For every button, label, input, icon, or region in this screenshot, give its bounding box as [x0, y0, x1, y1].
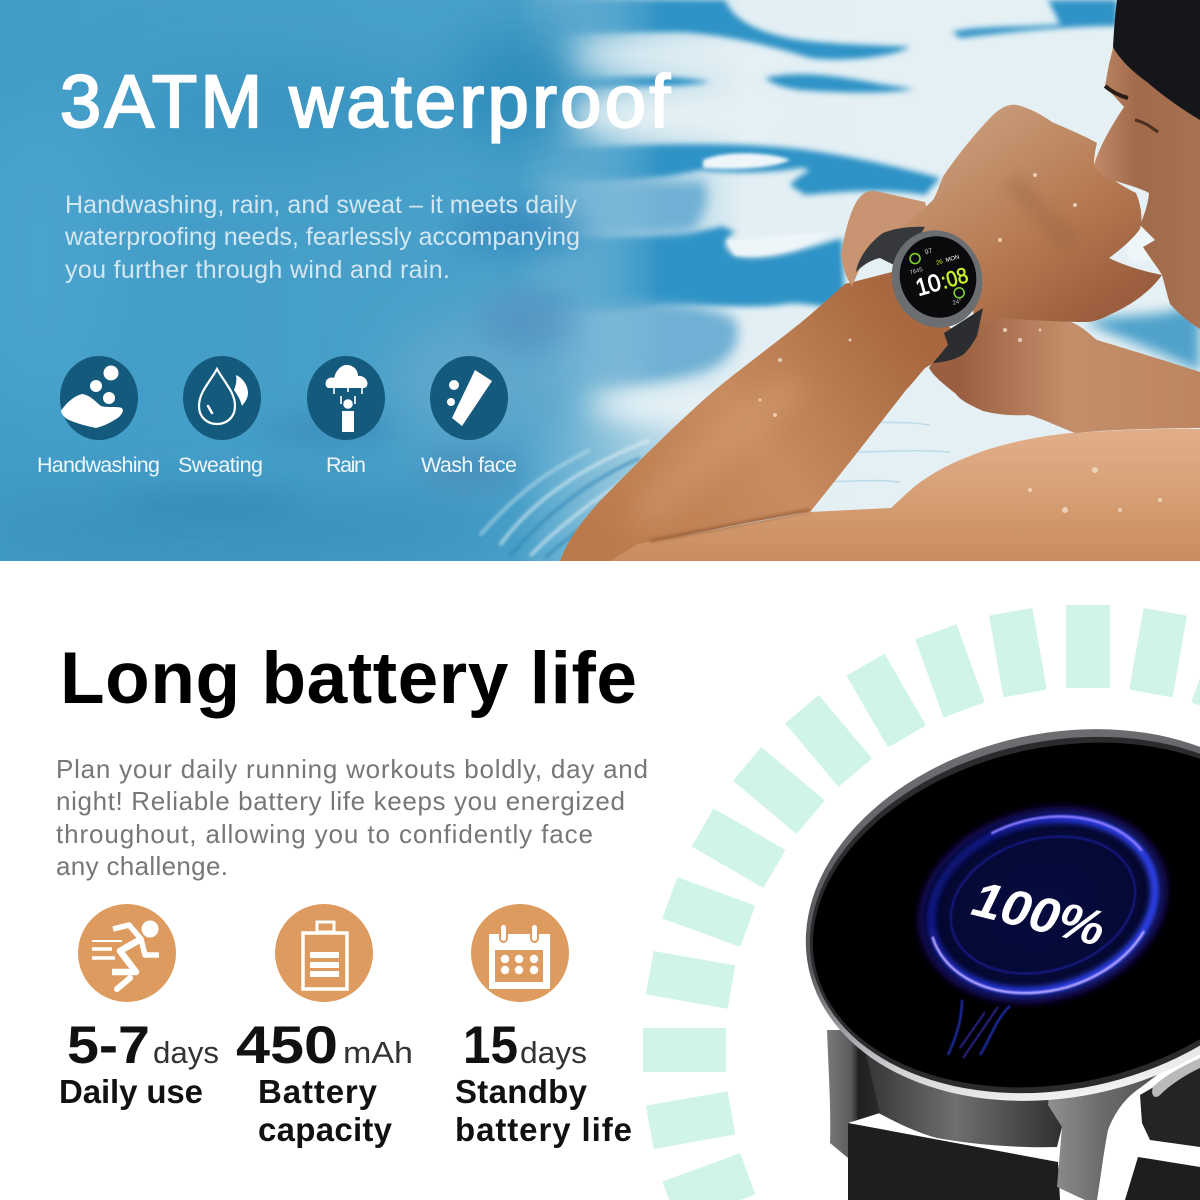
stat: 15 days standby battery life	[455, 1016, 632, 1148]
icon labels: Wash face	[421, 453, 517, 477]
watch screen	[900, 236, 976, 318]
stat: 5-7 days daily use: Daily use	[59, 1073, 203, 1110]
watch time display	[909, 248, 968, 305]
heading: Long battery life: Long battery life	[60, 638, 637, 719]
stat: 5-7 days daily use	[59, 1016, 219, 1110]
skin highlights and water droplets	[640, 173, 1162, 541]
battery description text: night! Reliable battery life keeps you energized	[56, 786, 625, 816]
watch time display: 26	[936, 259, 944, 267]
watch time display: 10	[913, 269, 944, 302]
watch time display: 24°	[952, 298, 963, 307]
watch time display: 97	[924, 248, 933, 257]
right lug	[1048, 990, 1200, 1200]
swimmer face and swim cap	[1094, 0, 1200, 329]
lower hand and arm	[929, 318, 1200, 433]
smartwatch on wrist	[856, 226, 983, 363]
glowing blue charge ring	[899, 783, 1187, 1027]
watch time display: 7645	[909, 267, 924, 276]
stat: 15 days standby battery life: days	[520, 1035, 587, 1070]
case underside	[850, 1050, 1062, 1147]
battery description text: throughout, allowing you to confidently face	[56, 819, 593, 849]
left lug	[827, 1030, 880, 1158]
stat: 5-7 days daily use: days	[153, 1035, 219, 1070]
blue swells across the pool	[530, 0, 1117, 312]
icon: rain	[307, 356, 385, 440]
charging tail	[948, 1000, 1010, 1058]
waterproof description text: you further through wind and rain.	[65, 256, 450, 284]
icon: calendar	[471, 904, 569, 1002]
icon: runner	[78, 904, 176, 1002]
icon: wash face tube	[430, 356, 508, 440]
crown button	[1152, 1058, 1200, 1097]
fingers wrapping wrist	[841, 191, 930, 286]
icon labels: Handwashing	[37, 453, 160, 477]
watch case	[892, 230, 982, 328]
back of fist	[900, 105, 1162, 325]
watch straps	[848, 1123, 1060, 1200]
watch screen	[781, 699, 1200, 1131]
upper arm along pool edge	[560, 429, 1200, 561]
watch time display: :08	[938, 262, 971, 294]
battery description text: Plan your daily running workouts boldly, day and	[56, 754, 648, 784]
ripples near bottom centre	[480, 440, 650, 558]
stat: 450 mAh battery capacity	[236, 1016, 413, 1148]
icon: handwashing	[60, 356, 138, 440]
stat: 15 days standby battery life: Standby	[455, 1073, 588, 1110]
forearm	[560, 270, 965, 561]
waterproof description text: waterproofing needs, fearlessly accompanying	[64, 223, 580, 251]
stat: 450 mAh battery capacity: 450	[236, 1016, 338, 1075]
mint progress ring segments	[643, 605, 1200, 1200]
waterproof description text	[64, 191, 580, 284]
icon: sweating drop	[183, 356, 261, 440]
waterproof description text: Handwashing, rain, and sweat – it meets daily	[65, 191, 578, 219]
stat: 450 mAh battery capacity: mAh	[343, 1035, 413, 1070]
stat: 15 days standby battery life: battery life	[455, 1111, 632, 1148]
water background	[0, 0, 1200, 566]
stat: 450 mAh battery capacity: capacity	[258, 1111, 393, 1148]
icon: battery	[275, 904, 373, 1002]
large smartwatch showing 100% battery	[771, 684, 1200, 1200]
battery description text: any challenge.	[56, 851, 228, 881]
100% text: 100%	[967, 870, 1111, 957]
photo: swimmer with smartwatch at pool	[0, 0, 1200, 566]
stat: 450 mAh battery capacity: Battery	[258, 1073, 378, 1110]
stat: 5-7 days daily use: 5-7	[67, 1016, 150, 1075]
icon labels	[37, 453, 517, 477]
battery description text	[56, 754, 648, 881]
icon labels: Sweating	[178, 453, 263, 477]
title: 3ATM waterproof: 3ATM waterproof	[60, 60, 670, 143]
watch time display: MON	[945, 254, 960, 264]
stat: 15 days standby battery life: 15	[463, 1016, 518, 1075]
watch bezel	[771, 684, 1200, 1146]
icon labels: Rain	[326, 453, 366, 477]
watch strap	[856, 227, 925, 272]
